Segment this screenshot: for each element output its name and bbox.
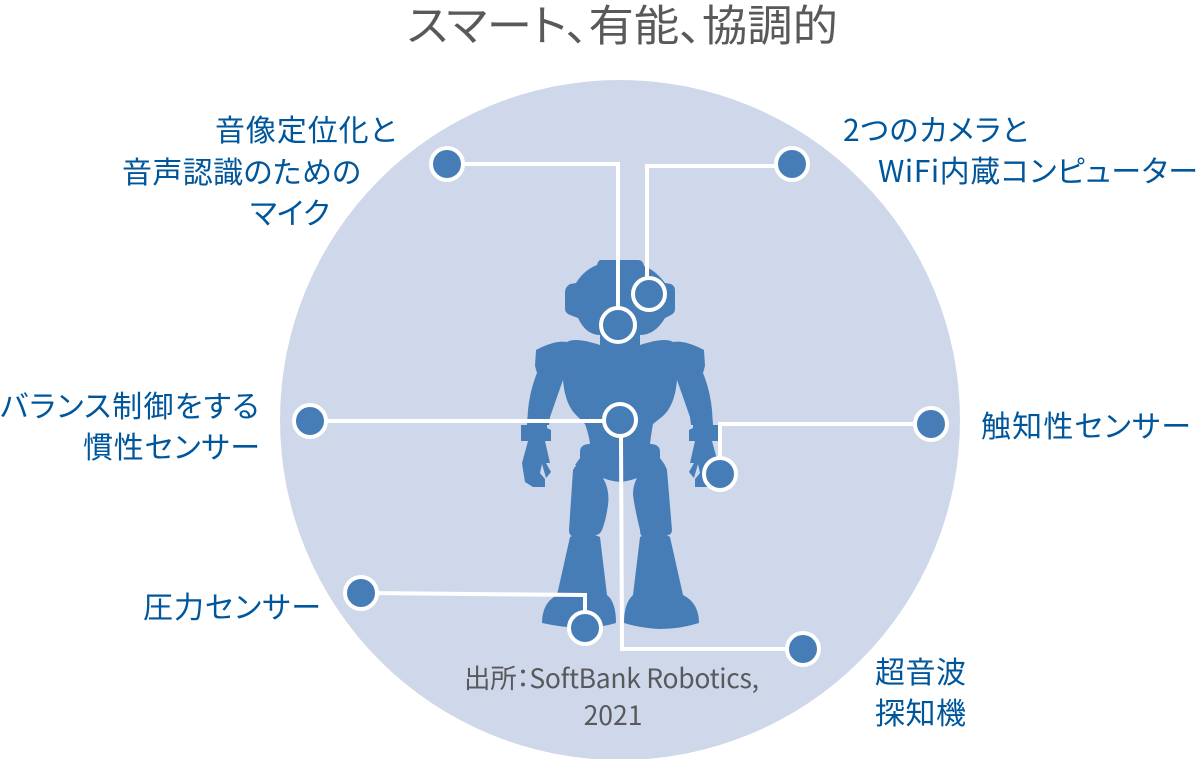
line: camera and computer bbox=[647, 166, 792, 278]
source note: 出所：SoftBank Robotics, bbox=[464, 657, 759, 696]
label: balance inertial sensor: バランス制御をする bbox=[0, 382, 259, 426]
source note: 2021 bbox=[584, 694, 642, 733]
label: balance inertial sensor bbox=[0, 382, 260, 467]
robot left wrist and hand bbox=[521, 425, 551, 487]
ring: torso bbox=[604, 404, 636, 436]
label: two cameras and wifi computer: 2つのカメラと bbox=[843, 106, 1028, 150]
label: sonar detector bbox=[875, 648, 966, 733]
label: sound localization and recognition mic: 音像定位化と bbox=[215, 106, 396, 150]
dot: pressure bbox=[345, 577, 377, 609]
robot ring markers bbox=[569, 278, 736, 644]
label: sound localization and recognition mic: マイク bbox=[250, 189, 330, 233]
label: balance inertial sensor: 慣性センサー bbox=[83, 423, 260, 467]
ring: camera bbox=[633, 278, 665, 310]
leader lines bbox=[310, 164, 931, 649]
dot: mic bbox=[431, 148, 463, 180]
line: inertial sensor bbox=[310, 419, 604, 423]
source note bbox=[464, 657, 759, 733]
outer dots bbox=[294, 148, 947, 665]
ring: head mic bbox=[601, 308, 635, 342]
robot right leg bbox=[620, 455, 699, 629]
robot silhouette bbox=[521, 260, 719, 629]
label: two cameras and wifi computer bbox=[843, 106, 1198, 191]
dot: tactile bbox=[915, 408, 947, 440]
label: tactile sensor: 触知性センサー bbox=[981, 402, 1191, 446]
dot: sonar bbox=[787, 633, 819, 665]
background circle bbox=[280, 80, 960, 759]
robot right wrist and hand bbox=[689, 425, 719, 487]
label: pressure sensor: 圧力センサー bbox=[143, 583, 321, 627]
line: sonar bbox=[621, 436, 803, 649]
label: sonar detector: 探知機 bbox=[875, 689, 966, 733]
line: pressure sensor bbox=[361, 593, 585, 612]
robot torso and upper arms bbox=[527, 340, 713, 465]
label: sound localization and recognition mic: 音声認識のための bbox=[122, 148, 361, 192]
robot head bbox=[565, 260, 675, 345]
dot: inertial bbox=[294, 405, 326, 437]
label: two cameras and wifi computer: WiFi内蔵コンピューター bbox=[878, 147, 1198, 191]
ring: foot bbox=[569, 612, 601, 644]
line: tactile sensor bbox=[720, 424, 931, 458]
dot: camera bbox=[776, 148, 808, 180]
robot left leg bbox=[542, 455, 620, 628]
line: sound localization mic bbox=[447, 164, 618, 308]
label: sonar detector: 超音波 bbox=[875, 648, 966, 692]
label: sound localization and recognition mic bbox=[122, 106, 396, 233]
ring: hand bbox=[704, 458, 736, 490]
